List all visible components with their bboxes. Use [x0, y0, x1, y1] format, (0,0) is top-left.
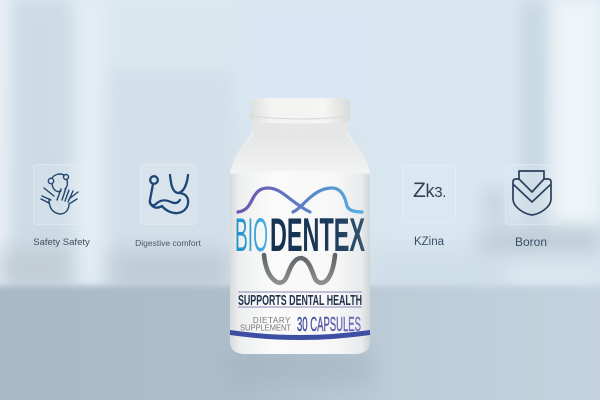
tagline: SUPPORTS DENTAL HEALTH — [238, 292, 362, 309]
tooth roots — [264, 255, 335, 283]
icon: Zk3 box — [402, 165, 456, 223]
shield glyph — [513, 171, 551, 215]
label: boron: Boron — [515, 235, 547, 249]
Zk3 text: Zk3. — [413, 179, 446, 202]
hand glyph — [41, 174, 78, 214]
label: safety: Safety Safety — [33, 237, 90, 248]
label: digestive comfort: Digestive comfort — [135, 238, 201, 248]
label stripe — [230, 330, 370, 340]
icon box: safety — [34, 164, 88, 224]
bottle: DENTEX — [270, 209, 365, 262]
bottle: 30 CAPSULES — [297, 314, 361, 336]
label: KZina: KZina — [414, 236, 444, 248]
stethoscope glyph — [150, 175, 188, 213]
icon box: boron — [506, 164, 560, 224]
tagline — [238, 292, 362, 309]
bottle: BIO — [235, 209, 268, 262]
dietary supplement — [240, 316, 291, 332]
dietary supplement: SUPPLEMENT — [240, 324, 291, 332]
dietary supplement: DIETARY — [253, 316, 291, 325]
icon box: stethoscope — [140, 164, 196, 224]
bottle shoulder tint — [230, 132, 370, 174]
bottle cap — [250, 98, 350, 124]
bottle body — [230, 128, 370, 354]
bottle neck shading — [252, 120, 348, 136]
label: tooth outline top — [238, 188, 362, 212]
